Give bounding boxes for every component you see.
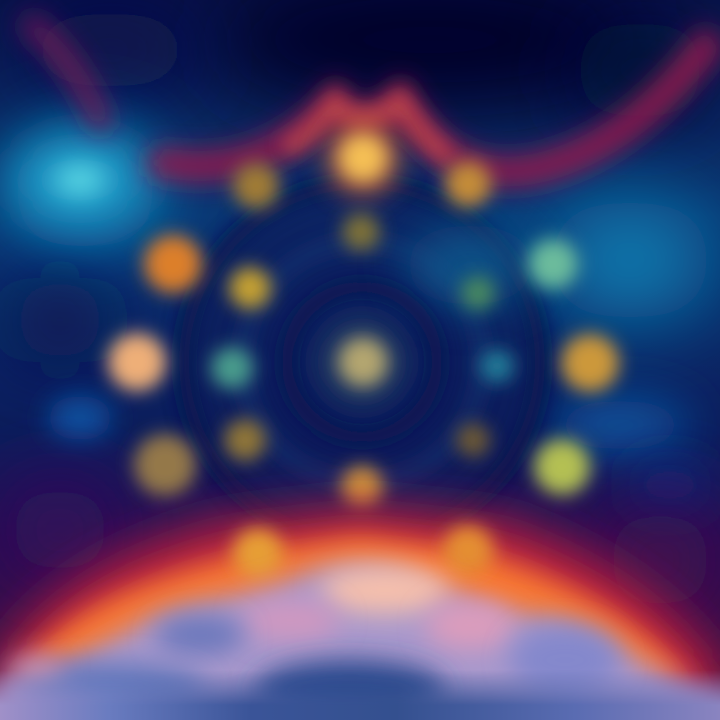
sun node: top	[323, 118, 403, 198]
red arc across the top	[25, 20, 715, 172]
mandala: dark rings	[184, 184, 540, 540]
clouds at the bottom	[0, 564, 720, 720]
orbit nodes	[108, 161, 619, 508]
glow: bright cyan star at left	[10, 135, 150, 225]
horizon: fiery glow	[0, 505, 720, 720]
